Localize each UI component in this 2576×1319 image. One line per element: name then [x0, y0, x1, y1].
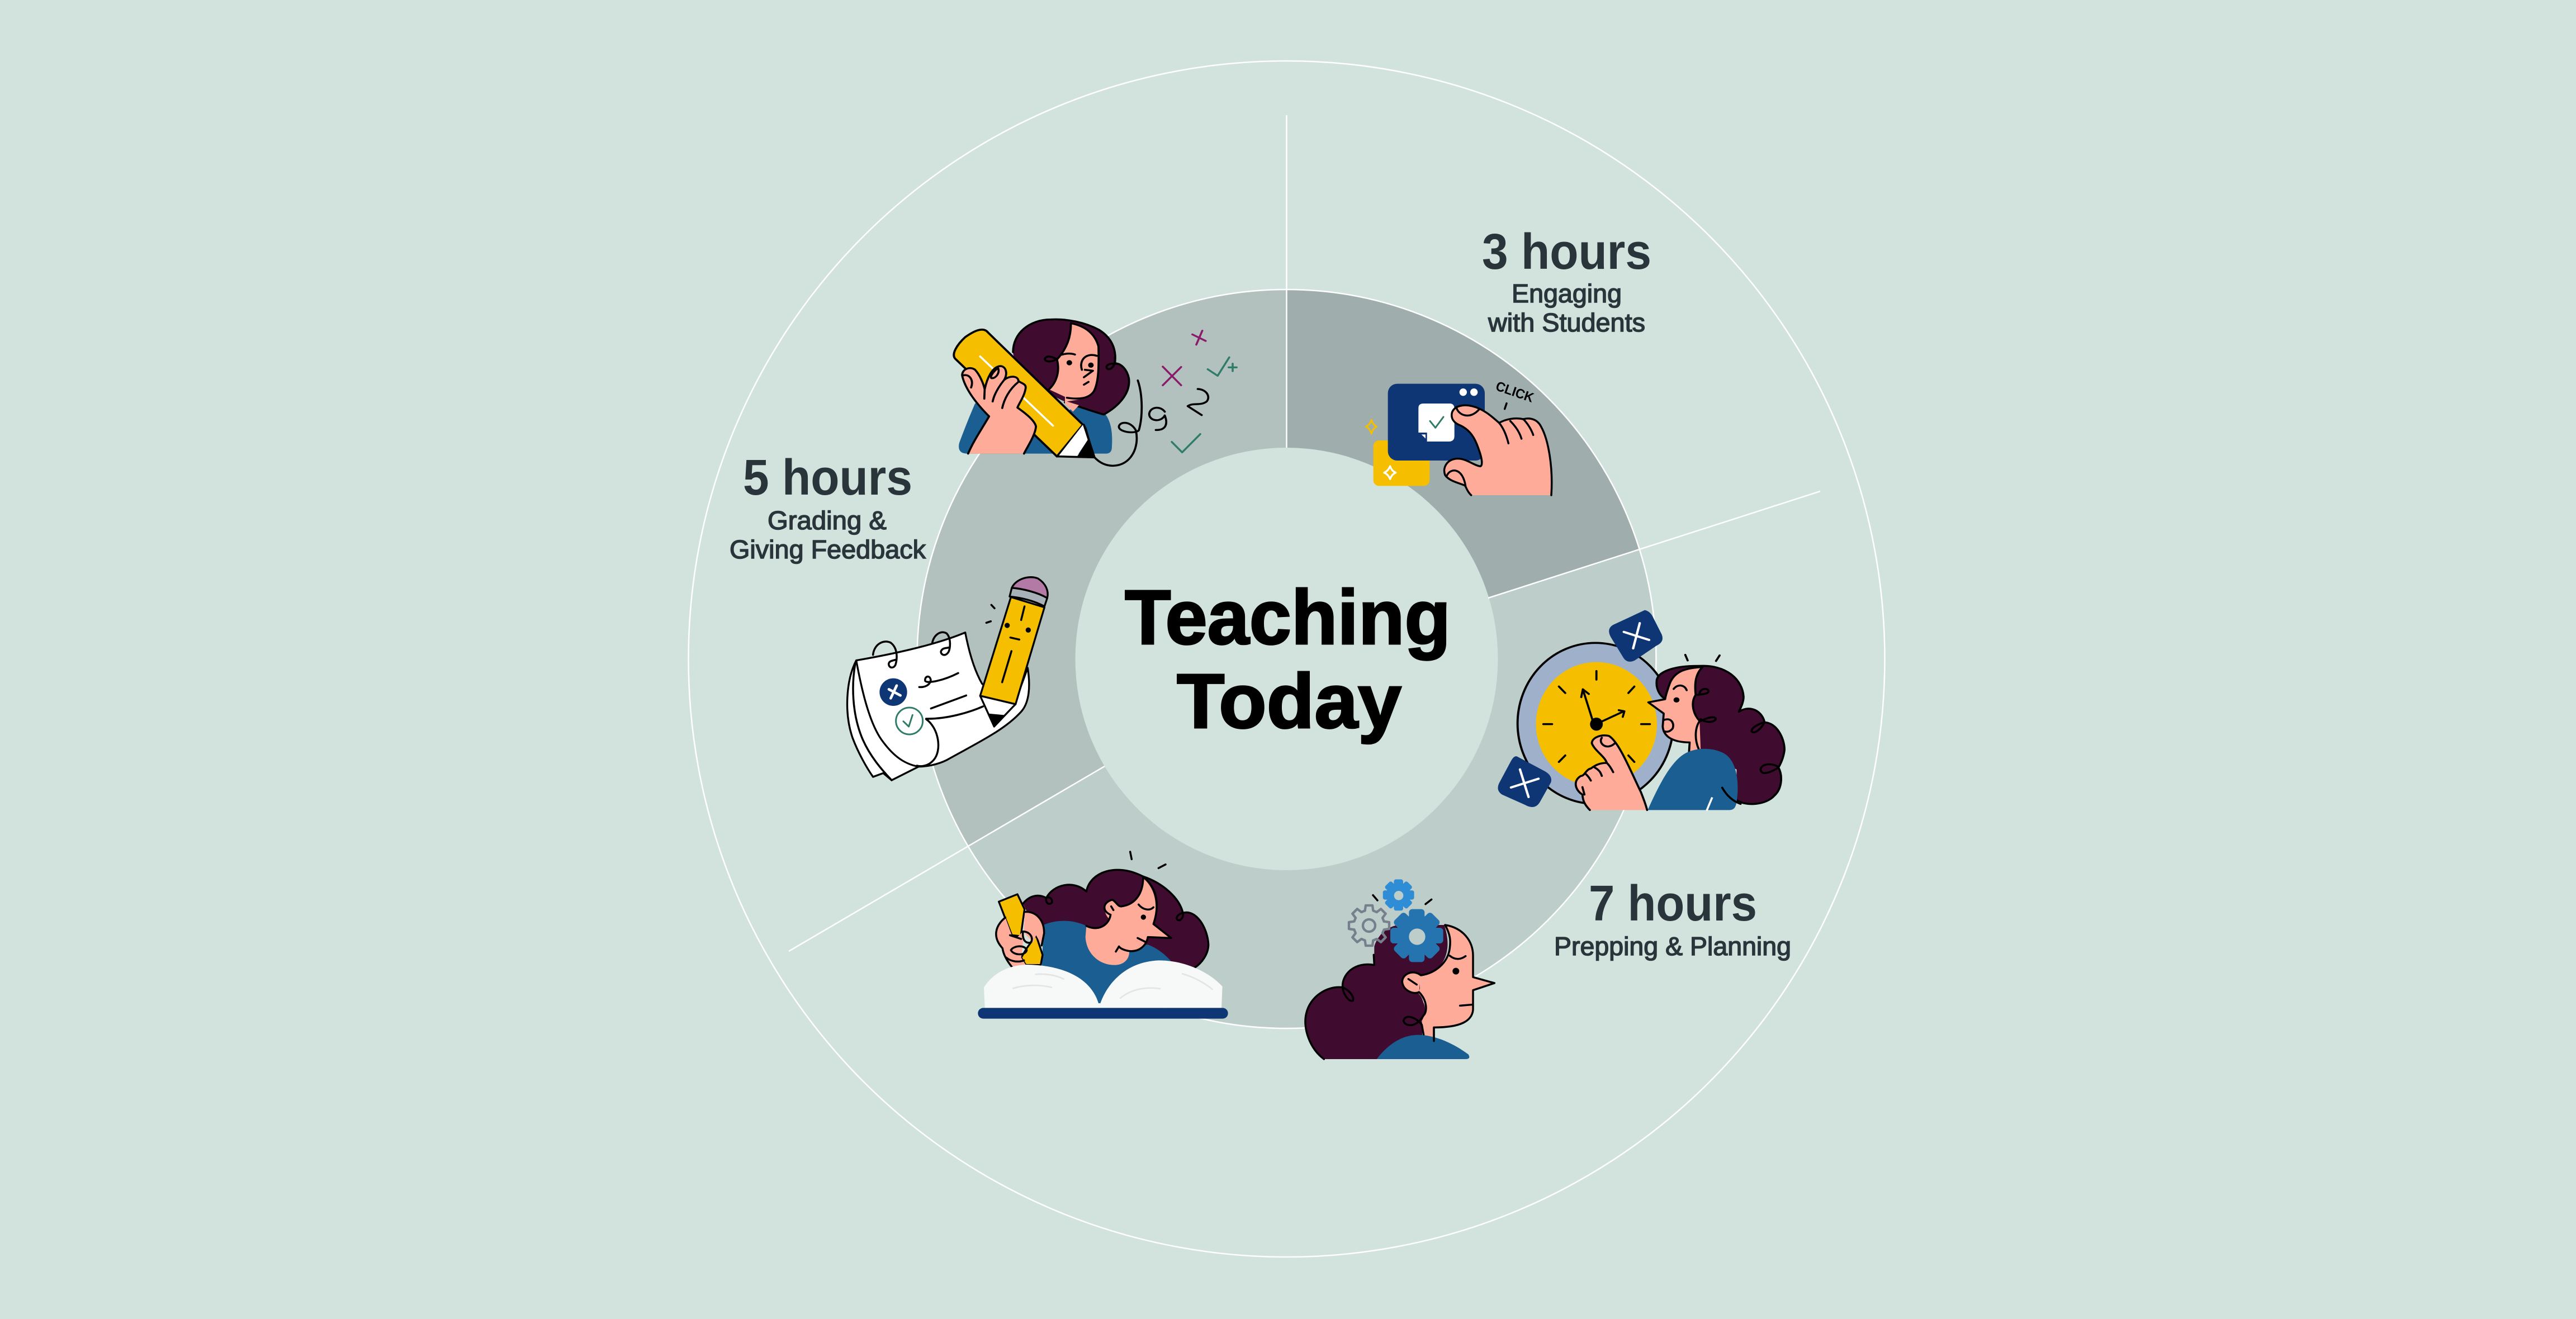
- title: [1125, 575, 1451, 744]
- gear: grey outline: [1349, 905, 1389, 946]
- description line 2: Giving Feedback: [730, 535, 926, 564]
- hours figure: 5 hours: [743, 450, 912, 506]
- hair: [1023, 870, 1209, 969]
- notepad pages: [847, 661, 918, 780]
- check mark: [896, 708, 923, 734]
- label: 5 hours: [730, 450, 926, 564]
- radial divider: 7 hours start: [1488, 491, 1820, 598]
- x mark: [879, 679, 907, 706]
- rings back: [873, 632, 946, 655]
- label: 7 hours: [1554, 876, 1791, 961]
- x badge top: [1609, 610, 1663, 662]
- ring outer edge: [917, 290, 1656, 1028]
- icon: woman reading open book: [978, 852, 1228, 1019]
- hours figure: 3 hours: [1482, 224, 1651, 280]
- writing hand: [996, 912, 1044, 967]
- segment: 5 hours: [917, 290, 1287, 846]
- click text: CLICK: [1494, 378, 1536, 406]
- centre hole: [1076, 448, 1498, 870]
- ruler: [954, 330, 1095, 457]
- icon: woman looking at clock: [1498, 610, 1784, 811]
- description line 1: Engaging: [1512, 279, 1622, 308]
- gear: large blue: [1390, 909, 1443, 962]
- description: Prepping & Planning: [1554, 932, 1791, 961]
- label: 3 hours: [1482, 224, 1651, 337]
- x badge bottom: [1498, 756, 1551, 807]
- face: [1649, 667, 1703, 753]
- shoulder: [1647, 749, 1737, 810]
- crayon: [999, 894, 1025, 936]
- title line 1: Teaching: [1125, 575, 1451, 661]
- pencil: [980, 577, 1048, 727]
- segment: 7 hours: [968, 549, 1656, 1028]
- segment: 3 hours: [1287, 290, 1639, 662]
- icon: hand clicking card: [1366, 378, 1552, 495]
- icon: woman with ruler and math symbols: [954, 319, 1237, 466]
- icon: notepad and pencil: [847, 577, 1048, 780]
- hair: [1687, 666, 1784, 804]
- donut chart: [789, 115, 1820, 1028]
- face: [1418, 925, 1494, 1038]
- clock: [1518, 643, 1673, 804]
- hand: [962, 366, 1036, 454]
- shoulders: [1377, 1035, 1469, 1059]
- gear: small blue: [1383, 879, 1414, 910]
- hours figure: 7 hours: [1589, 876, 1757, 932]
- description line 1: Grading &: [768, 506, 887, 535]
- description line 2: with Students: [1488, 308, 1645, 337]
- face: [1086, 879, 1171, 965]
- hair: [1305, 925, 1447, 1059]
- radial divider: 3 hours start: [1286, 115, 1287, 448]
- outer circle outline: [689, 61, 1885, 1257]
- radial divider: 5 hours start: [789, 766, 1105, 951]
- icon: woman thinking with gears: [1305, 879, 1494, 1059]
- title line 2: Today: [1177, 658, 1401, 744]
- rings front: [889, 633, 950, 667]
- pointing hand: [1576, 736, 1647, 810]
- body: [1041, 921, 1171, 1004]
- open book: [978, 960, 1228, 1019]
